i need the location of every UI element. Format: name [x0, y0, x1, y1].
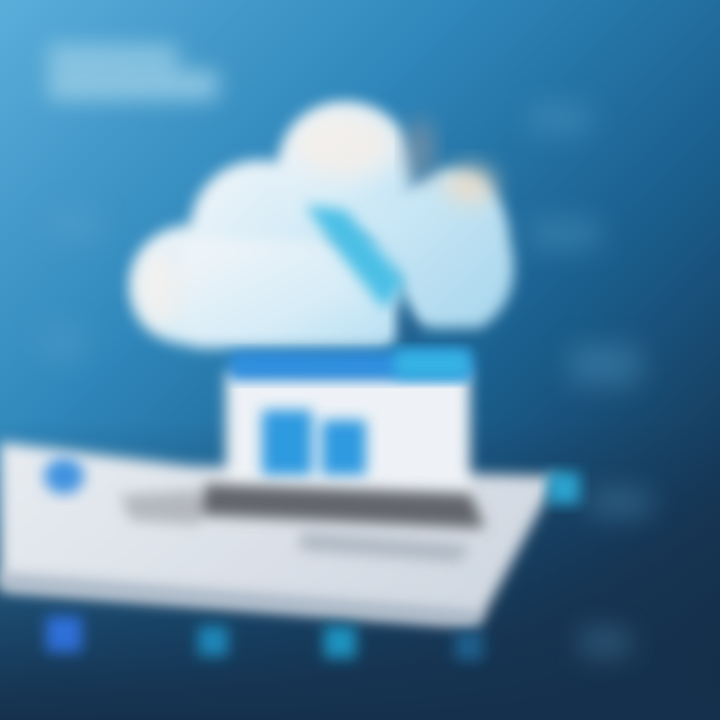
keyboard hinge	[120, 484, 485, 562]
screen header cyan	[395, 350, 470, 378]
screen header bar	[230, 352, 470, 380]
blurred heading block	[48, 45, 218, 100]
cloud: right lobe	[345, 170, 514, 328]
faint background labels	[40, 105, 650, 655]
laptop base	[0, 442, 558, 628]
icon: cyan key right	[548, 472, 580, 504]
cloud	[130, 102, 514, 348]
cloud: dark gap below	[398, 300, 430, 345]
cloud: warm highlight	[295, 113, 395, 177]
bottom row icons	[46, 616, 483, 660]
cloud: left lobe	[130, 102, 413, 348]
laptop screen	[226, 350, 470, 492]
cloud: peach top right	[444, 165, 496, 205]
laptop base: front edge	[0, 572, 480, 628]
cloud: cyan accent	[305, 205, 405, 310]
icon: blue key left	[44, 458, 84, 494]
screen tiles	[262, 410, 366, 475]
cloud: shadow	[406, 118, 434, 182]
